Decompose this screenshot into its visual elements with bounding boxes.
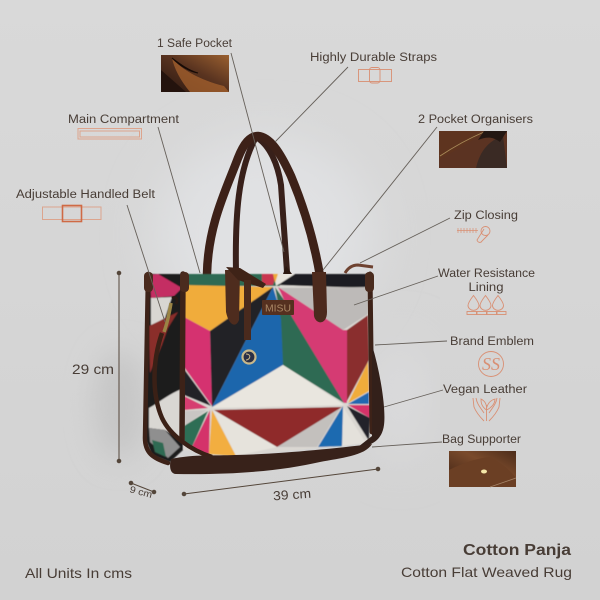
height label: 29 cm [72,361,114,377]
back handle foot [283,266,292,274]
back handle [236,137,287,272]
label: pocket organisers: 2 Pocket Organisers [418,114,533,126]
height dimension [117,271,121,463]
icon: zip [457,226,490,242]
note: units: All Units In cms [25,565,132,581]
label: water resistance: Water Resistance [438,268,535,280]
side panel of the bag [146,274,183,462]
width dimension [182,467,380,496]
width label: 39 cm [273,486,312,503]
pendant strap [244,280,251,340]
icon: brand emblem [478,352,504,376]
strap bottom band [170,444,372,474]
left strap tab [225,270,240,325]
photo: pocket organisers [439,131,507,168]
photo: bag supporter [449,451,516,487]
icon: main compartment [78,128,142,139]
title: product name: Cotton Panja [463,542,571,559]
right strap tab [312,272,327,322]
icon: brand emblem: SS [482,354,500,374]
handbag illustration [144,136,384,474]
woven front panel [183,274,370,456]
metal clip [164,297,177,332]
icon: hands and leaf [473,398,500,421]
label: adjustable belt: Adjustable Handled Belt [16,189,156,201]
label: main compartment: Main Compartment [68,114,180,126]
icon: durable straps [358,68,392,83]
depth dimension [129,481,156,494]
woven brand label: MISU [265,304,291,314]
shoulder strap [154,333,212,457]
zip pull [345,265,373,273]
icon: adjustable belt [42,206,101,222]
label: brand emblem: Brand Emblem [450,336,534,348]
label: zip closing: Zip Closing [454,210,518,222]
label: durable straps: Highly Durable Straps [310,52,437,64]
leader lines [127,53,450,447]
subtitle: material: Cotton Flat Weaved Rug [401,564,572,580]
front handle [207,136,320,276]
depth label: 9 cm [128,484,153,501]
woven brand label [262,300,294,315]
icon: water drops [467,296,506,314]
metal pendant emblem [242,350,256,364]
label: water resistance [438,268,535,294]
photo: safe pocket [161,55,229,92]
label: vegan leather: Vegan Leather [443,384,527,396]
label: water resistance: Lining [468,282,504,294]
bag right side bulge [358,345,384,447]
label: safe pocket: 1 Safe Pocket [157,38,233,50]
frame corner tabs [144,272,374,292]
strap bow [226,267,266,288]
bag leather frame [145,274,372,463]
label: bag supporter: Bag Supporter [442,434,521,446]
